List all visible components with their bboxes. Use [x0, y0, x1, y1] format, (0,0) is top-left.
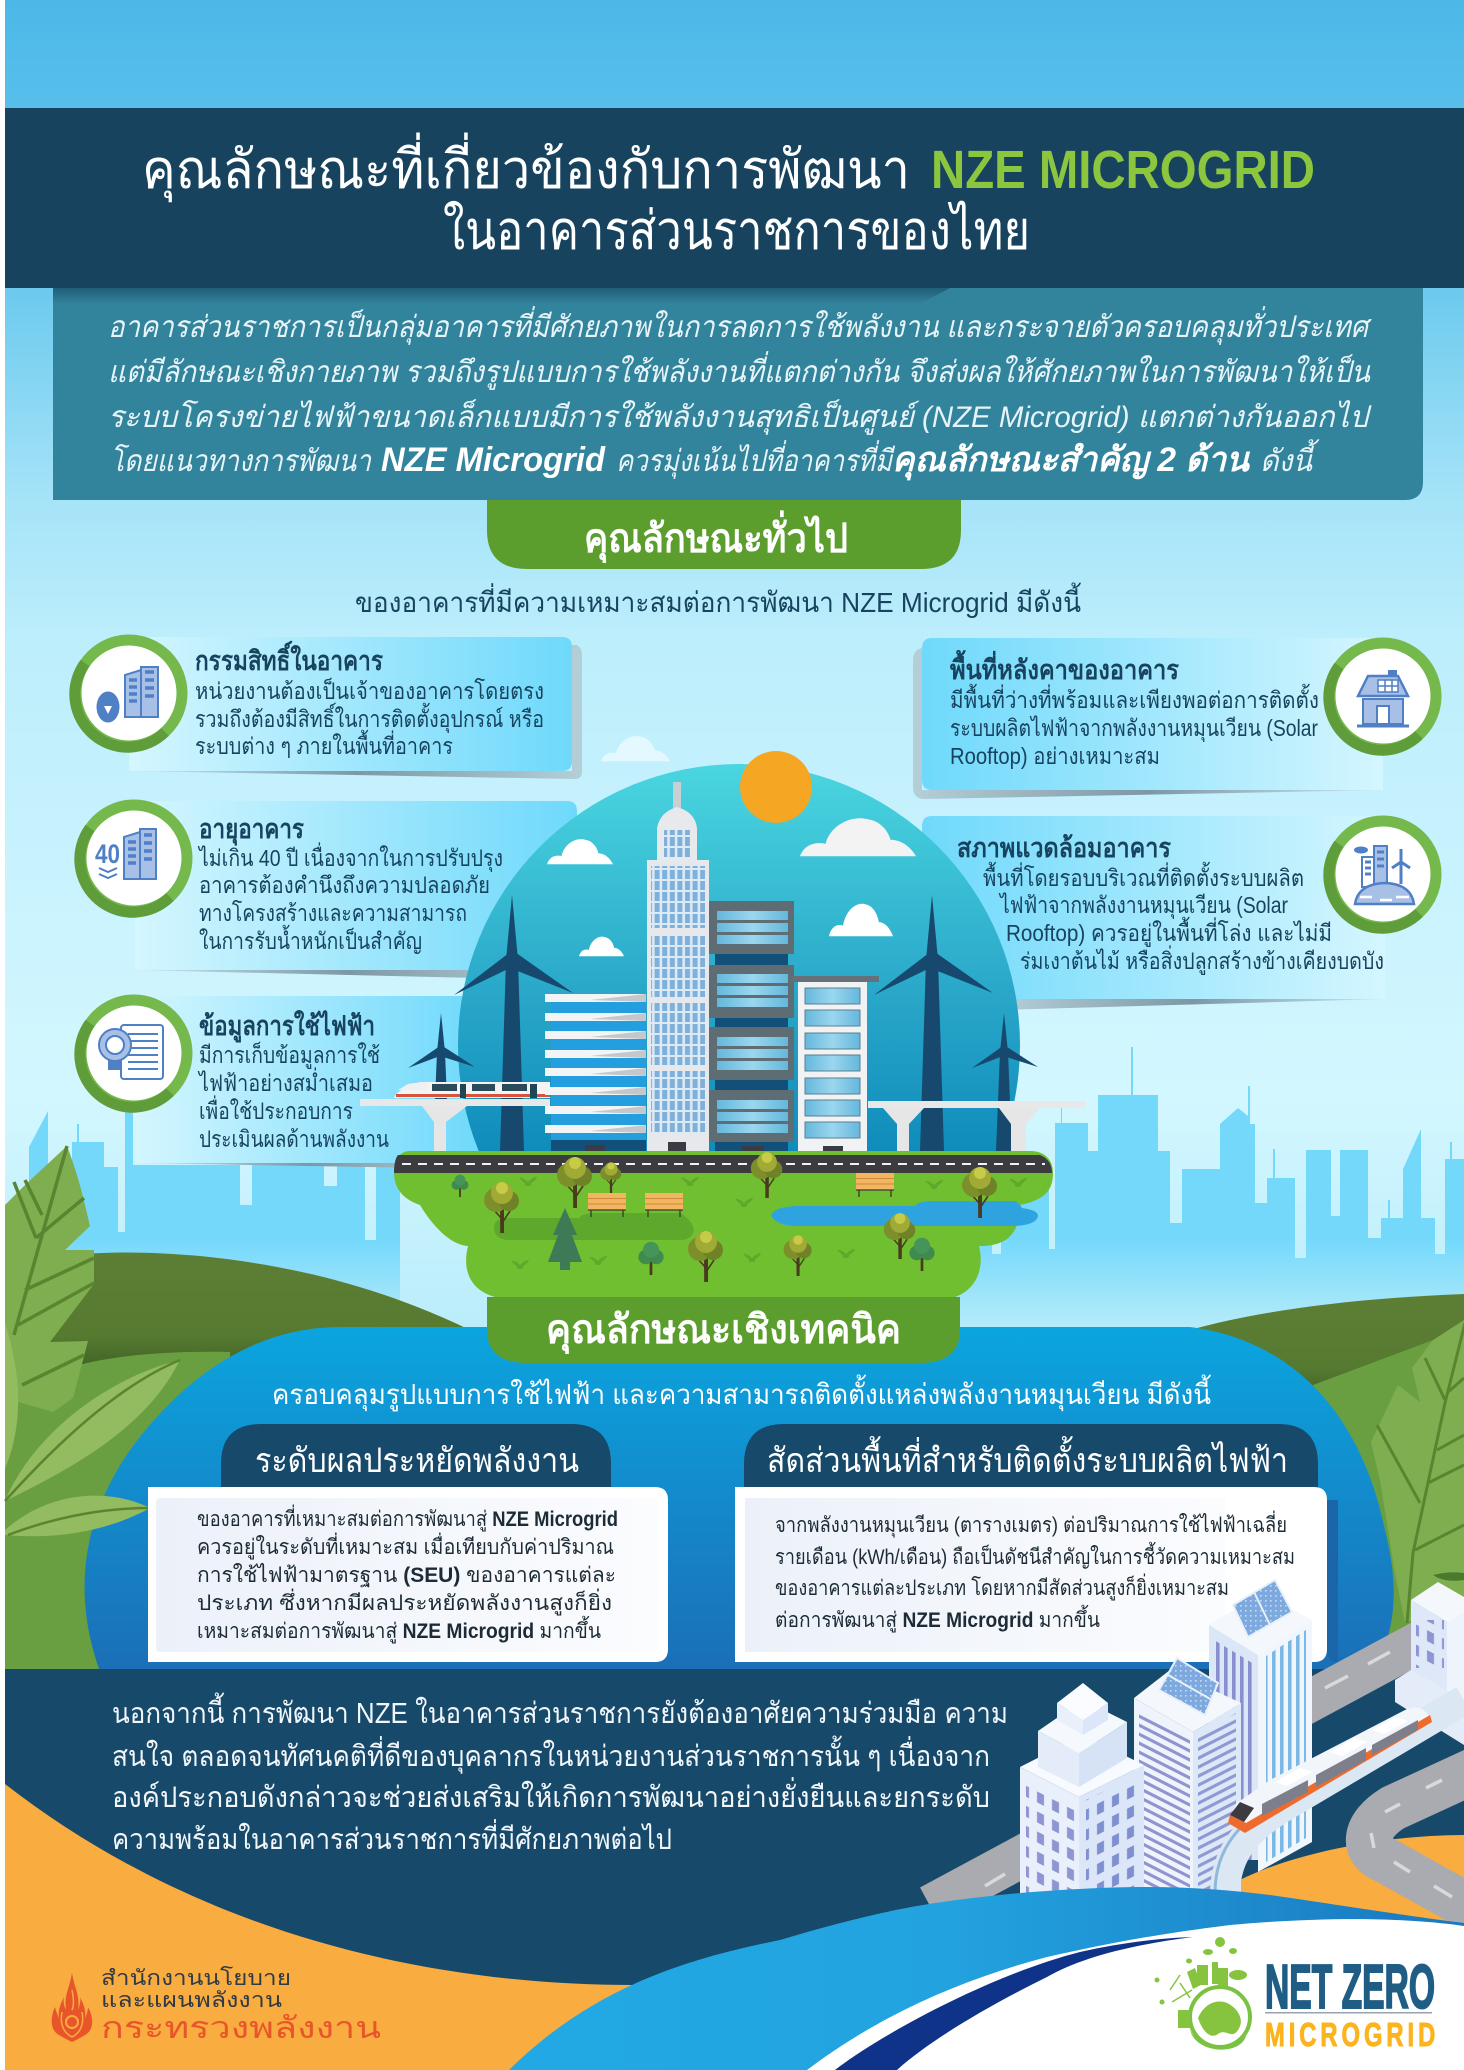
- swoosh: navy stripe: [835, 1937, 1193, 2070]
- technical subheading: ครอบคลุมรูปแบบการใช้ไฟฟ้า และความสามารถติดตั้งแหล่งพลังงานหมุนเวียน มีดังนี้: [272, 1374, 1211, 1412]
- clouds: [547, 818, 916, 956]
- hill: right dark: [1190, 1294, 1464, 1400]
- intro panel: ควรมุ่งเน้นไปที่อาคารที่มี: [616, 440, 895, 479]
- dark bottom band base: [5, 1780, 1464, 2070]
- icon: rooftop: [1329, 643, 1436, 750]
- isometric towers: [1020, 1580, 1464, 1895]
- card 2 text: ในการรับน้ำหนักเป็นสำคัญ: [199, 925, 422, 954]
- tower C: [1209, 1580, 1312, 1872]
- card 1 text: ระบบต่าง ๆ ภายในพื้นที่อาคาร: [195, 730, 453, 759]
- card 4 panel: rooftop: [913, 638, 1383, 799]
- central buildings: [545, 782, 879, 1155]
- hill: left light green: [5, 1352, 240, 1669]
- card 5 panel: environment: [922, 816, 1385, 1010]
- illustration dome: [458, 764, 1020, 1151]
- city skyline silhouette left: [5, 1111, 400, 1330]
- card 4 text: พื้นที่หลังคาของอาคาร: [950, 649, 1179, 685]
- card 1 text: หน่วยงานต้องเป็นเจ้าของอาคารโดยตรง: [195, 676, 544, 704]
- white card right: area ratio: รายเดือน (kWh/เดือน) ถือเป็นดัชนีสำคัญในการชี้วัดความเหมาะสม: [775, 1542, 1295, 1569]
- title: [142, 132, 1315, 261]
- road: curved right: [1369, 1768, 1464, 1913]
- pill: technical heading: [487, 1297, 960, 1363]
- white card right: area ratio: จากพลังงานหมุนเวียน (ตารางเมตร) ต่อปริมาณการใช้ไฟฟ้าเฉลี่ย: [775, 1510, 1287, 1538]
- closing paragraph: สนใจ ตลอดจนทัศนคติที่ดีของบุคลากรในหน่วยงานส่วนราชการนั้น ๆ เนื่องจาก: [112, 1735, 990, 1774]
- card 2 panel: building age: [135, 801, 577, 980]
- card 2 text: อาคารต้องคำนึงถึงความปลอดภัย: [199, 872, 490, 898]
- icon: electricity data: [80, 1000, 187, 1107]
- card 5 text: [957, 833, 1384, 975]
- pill: general heading: คุณลักษณะทั่วไป: [584, 510, 848, 564]
- city skyline silhouette right: [950, 1047, 1464, 1330]
- lake: [771, 1201, 1038, 1226]
- white card left: energy saving: การใช้ไฟฟ้ามาตรฐาน (SEU) ของอาคารแต่ละ: [197, 1563, 616, 1587]
- card 3 text: มีการเก็บข้อมูลการใช้: [199, 1040, 380, 1069]
- card 5 text: พื้นที่โดยรอบบริเวณที่ติดตั้งระบบผลิต: [983, 862, 1304, 891]
- green island ground: [394, 1151, 1053, 1297]
- card 5 text: Rooftop) ควรอยู่ในพื้นที่โล่ง และไม่มี: [1006, 917, 1332, 947]
- elevated rail track: [360, 1099, 1085, 1154]
- logo: net zero microgrid: MICROGRID: [1265, 2017, 1439, 2054]
- tall glass tower: [647, 782, 709, 1155]
- white card left: energy saving: [148, 1424, 668, 1662]
- tower A: [1020, 1683, 1144, 1895]
- intro panel: คุณลักษณะสำคัญ 2 ด้าน: [892, 441, 1251, 481]
- card 3 text: เพื่อใช้ประกอบการ: [199, 1095, 353, 1124]
- white card right: area ratio: [735, 1424, 1338, 1662]
- card 1 text: กรรมสิทธิ์ในอาคาร: [195, 641, 383, 676]
- closing paragraph: [112, 1692, 1008, 1856]
- logo: ministry of energy: สำนักงานนโยบาย: [101, 1966, 291, 1990]
- intro panel: แต่มีลักษณะเชิงกายภาพ รวมถึงรูปแบบการใช้พลังงานที่แตกต่างกัน จึงส่งผลให้ศักยภาพในการพัฒนาให้เป็น: [108, 351, 1371, 390]
- white card left: energy saving: ประเภท ซึ่งหากมีผลประหยัดพลังงานสูงก็ยิ่ง: [197, 1588, 612, 1616]
- card 1 panel: ownership: [129, 637, 582, 779]
- card 2 text: [197, 814, 503, 954]
- white card left: energy saving: ระดับผลประหยัดพลังงาน: [255, 1442, 579, 1480]
- wind turbines: [408, 895, 1038, 1151]
- intro panel: NZE Microgrid: [381, 441, 606, 479]
- sky train: [394, 1082, 550, 1098]
- card 4 text: Rooftop) อย่างเหมาะสม: [950, 743, 1160, 769]
- card 5 text: สภาพแวดล้อมอาคาร: [957, 833, 1171, 863]
- icon: green globe: [1154, 1937, 1250, 2050]
- swoosh: white corner: [807, 1919, 1464, 2070]
- card 3 text: [197, 1010, 389, 1152]
- park trees and benches: [452, 1152, 1027, 1282]
- icon: ownership: [75, 640, 182, 747]
- card 3 text: ไฟฟ้าอย่างสม่ำเสมอ: [197, 1067, 373, 1096]
- logo: ministry of energy: [52, 1966, 381, 2045]
- white card left: energy saving: ควรอยู่ในระดับที่เหมาะสม เมื่อเทียบกับค่าปริมาณ: [197, 1532, 614, 1560]
- card 5 text: ร่มเงาต้นไม้ หรือสิ่งปลูกสร้างข้างเคียงบดบัง: [1020, 945, 1384, 975]
- panel: blue rounded technical section: [85, 1327, 1394, 1669]
- general subheading: ของอาคารที่มีความเหมาะสมต่อการพัฒนา NZE Microgrid มีดังนี้: [355, 582, 1081, 618]
- card 3 panel: electricity data: [135, 996, 480, 1169]
- icon: environment: [1329, 821, 1436, 928]
- title band: [5, 108, 1464, 288]
- pill: general heading: [487, 500, 961, 569]
- small pale cloud: [601, 736, 670, 761]
- card 3 text: ประเมินผลด้านพลังงาน: [199, 1126, 389, 1152]
- pill: technical heading: คุณลักษณะเชิงเทคนิค: [546, 1308, 901, 1355]
- intro panel: อาคารส่วนราชการเป็นกลุ่มอาคารที่มีศักยภาพในการลดการใช้พลังงาน และกระจายตัวครอบคลุมทั่วประเทศ: [108, 306, 1373, 345]
- title: NZE MICROGRID: [931, 140, 1315, 200]
- closing paragraph: องค์ประกอบดังกล่าวจะช่วยส่งเสริมให้เกิดการพัฒนาอย่างยั่งยืนและยกระดับ: [112, 1777, 990, 1814]
- white building: [791, 976, 879, 1155]
- swoosh: blue curve: [509, 1887, 1464, 2070]
- dark band: [5, 1669, 1464, 1985]
- sun: [740, 751, 812, 823]
- intro panel: โดยแนวทางการพัฒนา: [110, 443, 372, 478]
- white card left: energy saving: เหมาะสมต่อการพัฒนาสู่ NZE Microgrid มากขึ้น: [197, 1616, 601, 1644]
- logo: ministry of energy: กระทรวงพลังงาน: [101, 2012, 381, 2045]
- icon: flame: [52, 1973, 92, 2042]
- intro panel: ดังนี้: [1260, 439, 1320, 478]
- tower B: [1134, 1658, 1241, 1895]
- card 5 text: ไฟฟ้าจากพลังงานหมุนเวียน (Solar: [998, 892, 1288, 919]
- white card left: energy saving: ของอาคารที่เหมาะสมต่อการพัฒนาสู่ NZE Microgrid: [197, 1504, 618, 1532]
- white card right: area ratio: ของอาคารแต่ละประเภท โดยหากมีสัดส่วนสูงก็ยิ่งเหมาะสม: [775, 1573, 1229, 1601]
- hill: right light green: [1313, 1330, 1464, 1669]
- intro panel: ระบบโครงข่ายไฟฟ้าขนาดเล็กแบบมีการใช้พลังงานสุทธิเป็นศูนย์ (NZE Microgrid) แตกต่างกันออกไป: [108, 399, 1372, 435]
- logo: net zero microgrid: [1154, 1937, 1439, 2054]
- intro panel: [53, 288, 1423, 500]
- card 4 text: มีพื้นที่ว่างที่พร้อมและเพียงพอต่อการติดตั้ง: [950, 684, 1319, 713]
- isometric train: [1228, 1708, 1432, 1833]
- leaves: right foliage: [1371, 1320, 1464, 1623]
- elevated curved track: [1225, 1700, 1464, 1895]
- title: คุณลักษณะที่เกี่ยวข้องกับการพัฒนา: [142, 132, 910, 203]
- gray stacked building: [709, 901, 794, 1155]
- title: ในอาคารส่วนราชการของไทย: [443, 200, 1030, 261]
- card 4 text: [950, 649, 1319, 769]
- left blue building: [545, 994, 646, 1155]
- card 2 text: ทางโครงสร้างและความสามารถ: [199, 900, 467, 926]
- card 3 text: ข้อมูลการใช้ไฟฟ้า: [199, 1010, 375, 1043]
- white card right: area ratio: ต่อการพัฒนาสู่ NZE Microgrid มากขึ้น: [775, 1605, 1100, 1633]
- card 1 text: รวมถึงต้องมีสิทธิ์ในการติดตั้งอุปกรณ์ หรือ: [195, 702, 544, 733]
- white card right: area ratio: สัดส่วนพื้นที่สำหรับติดตั้งระบบผลิตไฟฟ้า: [767, 1436, 1288, 1480]
- card 1 text: [195, 641, 544, 759]
- hill: left dark: [5, 1253, 480, 1372]
- icon: building age: 40: [95, 839, 120, 869]
- closing paragraph: ความพร้อมในอาคารส่วนราชการที่มีศักยภาพต่อไป: [112, 1819, 672, 1856]
- tower D: [1395, 1582, 1464, 1745]
- card 4 text: ระบบผลิตไฟฟ้าจากพลังงานหมุนเวียน (Solar: [950, 715, 1318, 742]
- closing paragraph: นอกจากนี้ การพัฒนา NZE ในอาคารส่วนราชการยังต้องอาศัยความร่วมมือ ความ: [112, 1692, 1008, 1730]
- card 2 text: อายุอาคาร: [199, 814, 304, 846]
- leaves: left foliage: [5, 1146, 180, 1536]
- logo: ministry of energy: และแผนพลังงาน: [101, 1989, 282, 2012]
- road: upper diagonal: [930, 1631, 1440, 1906]
- road dashes right: [1371, 1780, 1452, 1897]
- card 2 text: ไม่เกิน 40 ปี เนื่องจากในการปรับปรุง: [197, 842, 503, 872]
- icon: building age: [80, 805, 187, 912]
- road dashes upper: [985, 1652, 1390, 1886]
